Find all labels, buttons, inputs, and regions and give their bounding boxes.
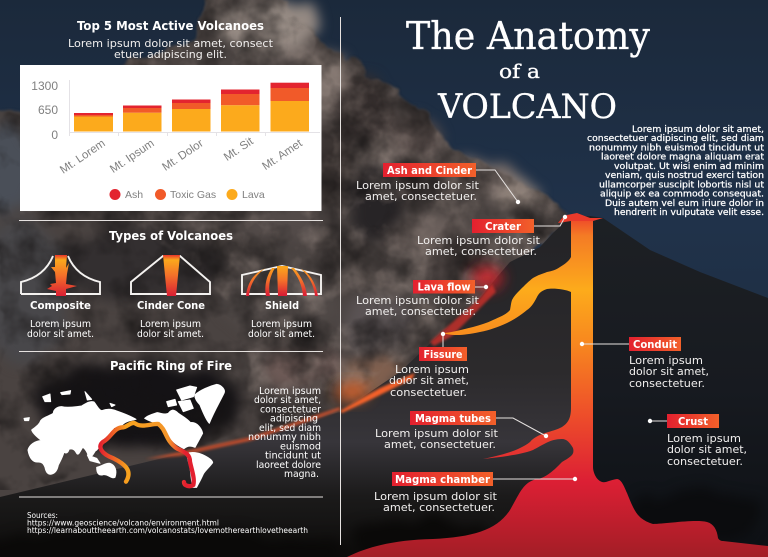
sources: Sources: bbox=[27, 511, 58, 520]
bar: Mt. Lorem bbox=[74, 113, 113, 132]
chart legend: Ash bbox=[125, 189, 143, 201]
sources: https://www.geoscience/volcano/environment.html bbox=[27, 518, 219, 528]
intro paragraph: ullamcorper suscipit lobortis nisl ut bbox=[599, 180, 765, 190]
icon: cinder cone volcano bbox=[131, 255, 210, 296]
ring of fire text: magna. bbox=[284, 469, 319, 480]
ring of fire text: consectetuer bbox=[260, 404, 322, 416]
volcano type: cinder cone caption: Lorem ipsum bbox=[140, 319, 201, 330]
volcano type: cinder cone caption: dolor sit amet. bbox=[137, 329, 204, 340]
intro paragraph: Duis autem vel eum iriure dolor in bbox=[605, 199, 764, 209]
callout: magma tubes: Magma tubes bbox=[415, 413, 491, 425]
title bbox=[406, 14, 651, 127]
ring of fire text: dolor sit amet, bbox=[254, 395, 321, 406]
heading: top 5 volcanoes: Top 5 Most Active Volcanoes bbox=[77, 18, 264, 33]
callout: magma tubes: amet, consectetuer. bbox=[384, 439, 496, 451]
chart x axis labels bbox=[58, 135, 305, 176]
volcano type: composite caption bbox=[27, 300, 94, 340]
title: The Anatomy bbox=[406, 14, 651, 58]
world map with ring of fire bbox=[24, 384, 224, 487]
bar: Mt. Amet bbox=[270, 83, 309, 132]
background: lava glow and fire streaks bbox=[145, 266, 503, 459]
chart x axis labels: Mt. Ipsum bbox=[108, 138, 157, 176]
title: VOLCANO bbox=[437, 87, 617, 127]
sources: https://learnabouttheearth.com/volcanostats/lovemotherearthlovetheearth bbox=[27, 526, 308, 535]
callout: crust: consectetuer. bbox=[667, 456, 743, 468]
callout: lava flow: Lava flow bbox=[418, 282, 471, 294]
chart y axis labels: 0 bbox=[51, 128, 58, 142]
callout: ash and cinder: Lorem ipsum dolor sit bbox=[356, 180, 479, 192]
callout: conduit: consectetuer. bbox=[629, 378, 705, 390]
heading: types of volcanoes: Types of Volcanoes bbox=[109, 228, 233, 243]
callout: fissure: consectetuer. bbox=[390, 387, 467, 399]
background: tree silhouettes bbox=[0, 489, 765, 557]
chart x axis labels: Mt. Amet bbox=[260, 137, 305, 173]
icon: shield volcano bbox=[242, 266, 321, 296]
ring of fire text: euismod bbox=[280, 442, 321, 452]
chart y axis labels bbox=[31, 79, 58, 142]
intro paragraph: consectetuer adipiscing elit, sed diam bbox=[587, 134, 764, 144]
intro paragraph: laoreet dolore magna aliquam erat bbox=[601, 152, 765, 162]
vertical divider bbox=[340, 17, 342, 545]
heading: top 5 volcanoes: Lorem ipsum dolor sit amet, consect bbox=[68, 38, 273, 50]
background: mountain slope bbox=[0, 216, 768, 557]
callout: magma tubes: Lorem ipsum dolor sit bbox=[375, 428, 498, 440]
ring of fire text: tincidunt ut bbox=[265, 450, 321, 462]
ring of fire text: laoreet dolore bbox=[256, 460, 321, 471]
intro paragraph: volutpat. Ut wisi enim ad minim bbox=[614, 162, 764, 172]
chart y axis labels: 1300 bbox=[31, 79, 58, 93]
bar: Mt. Dolor bbox=[172, 100, 210, 132]
callout: fissure: Lorem ipsum bbox=[395, 364, 469, 376]
callout: lava flow bbox=[356, 280, 488, 318]
ring of fire text: adipiscing bbox=[270, 414, 318, 424]
callout: conduit: Lorem ipsum bbox=[629, 355, 703, 367]
volcano type: composite caption: Composite bbox=[30, 300, 91, 312]
chart y axis labels: 650 bbox=[38, 103, 58, 117]
callout: conduit: dolor sit amet, bbox=[629, 366, 709, 378]
heading: pacific ring of fire: Pacific Ring of Fire bbox=[110, 358, 232, 373]
callout: conduit bbox=[580, 337, 709, 390]
chart x axis labels: Mt. Lorem bbox=[58, 138, 108, 176]
intro paragraph: aliquip ex ea commodo consequat. bbox=[600, 190, 764, 200]
volcano type: shield caption: Lorem ipsum bbox=[251, 319, 312, 330]
chart x axis labels: Mt. Sit bbox=[222, 135, 256, 164]
intro paragraph bbox=[587, 125, 765, 218]
volcano type: composite caption: Lorem ipsum bbox=[30, 319, 91, 330]
callout: fissure: dolor sit amet, bbox=[389, 375, 469, 387]
callout: magma chamber: amet, consectetuer. bbox=[383, 502, 495, 514]
callout: crater: Crater bbox=[485, 221, 522, 233]
bar: Mt. Ipsum bbox=[123, 106, 162, 132]
callout: crater: Lorem ipsum dolor sit bbox=[417, 235, 540, 247]
callout: lava flow: Lorem ipsum dolor sit bbox=[356, 295, 479, 307]
ring of fire text bbox=[248, 386, 322, 480]
callout: crater: amet, consectetuer. bbox=[425, 246, 537, 258]
crater rim bbox=[558, 213, 603, 223]
chart legend: Lava bbox=[242, 189, 265, 201]
panel: stacked bar chart bbox=[20, 65, 322, 211]
callout: crust bbox=[648, 414, 747, 468]
chart legend bbox=[110, 189, 265, 201]
bar: Mt. Sit bbox=[221, 90, 260, 132]
callout: crust: Lorem ipsum bbox=[667, 433, 741, 445]
callout: conduit: Conduit bbox=[633, 339, 677, 351]
ring of fire text: nonummy nibh bbox=[248, 432, 321, 443]
callout: magma chamber: Magma chamber bbox=[395, 474, 491, 486]
chart x axis labels: Mt. Dolor bbox=[160, 137, 206, 174]
volcano type: shield caption bbox=[248, 300, 315, 340]
volcano type: cinder cone caption: Cinder Cone bbox=[137, 300, 205, 312]
callout: magma chamber bbox=[374, 472, 577, 514]
volcano type: shield caption: dolor sit amet. bbox=[248, 329, 315, 340]
intro paragraph: Lorem ipsum dolor sit amet, bbox=[632, 125, 764, 135]
ring of fire text: elit, sed diam bbox=[259, 423, 321, 434]
callout: magma tubes bbox=[375, 411, 548, 451]
volcano type: composite caption: dolor sit amet. bbox=[27, 329, 94, 340]
callout: crater bbox=[417, 215, 567, 258]
callout: ash and cinder: Ash and Cinder bbox=[387, 165, 473, 177]
ring of fire text: Lorem ipsum bbox=[259, 386, 321, 397]
callout: fissure: Fissure bbox=[424, 349, 462, 361]
chart legend: Toxic Gas bbox=[170, 189, 216, 201]
intro paragraph: hendrerit in vulputate velit esse. bbox=[614, 208, 764, 218]
intro paragraph: nonummy nibh euismod tincidunt ut bbox=[589, 144, 765, 154]
callout: ash and cinder: amet, consectetuer. bbox=[365, 191, 477, 203]
title: of a bbox=[499, 59, 540, 83]
icon: composite volcano bbox=[21, 255, 100, 296]
volcano type: cinder cone caption bbox=[137, 300, 205, 340]
callout: crust: Crust bbox=[678, 416, 708, 428]
heading: top 5 volcanoes: etuer adipiscing elit. bbox=[114, 49, 227, 61]
heading: top 5 volcanoes bbox=[68, 18, 273, 61]
callout: fissure bbox=[389, 332, 469, 399]
sources bbox=[27, 511, 308, 535]
volcano type: shield caption: Shield bbox=[265, 300, 299, 312]
callout: lava flow: amet, consectetuer. bbox=[365, 306, 476, 318]
callout: ash and cinder bbox=[356, 163, 520, 204]
magma conduit and chamber bbox=[347, 221, 768, 557]
intro paragraph: veniam, quis nostrud exerci tation bbox=[605, 171, 764, 181]
callout: crust: dolor sit amet, bbox=[667, 444, 747, 456]
background: smoke plume bbox=[0, 0, 566, 520]
callout: magma chamber: Lorem ipsum dolor sit bbox=[374, 491, 497, 503]
